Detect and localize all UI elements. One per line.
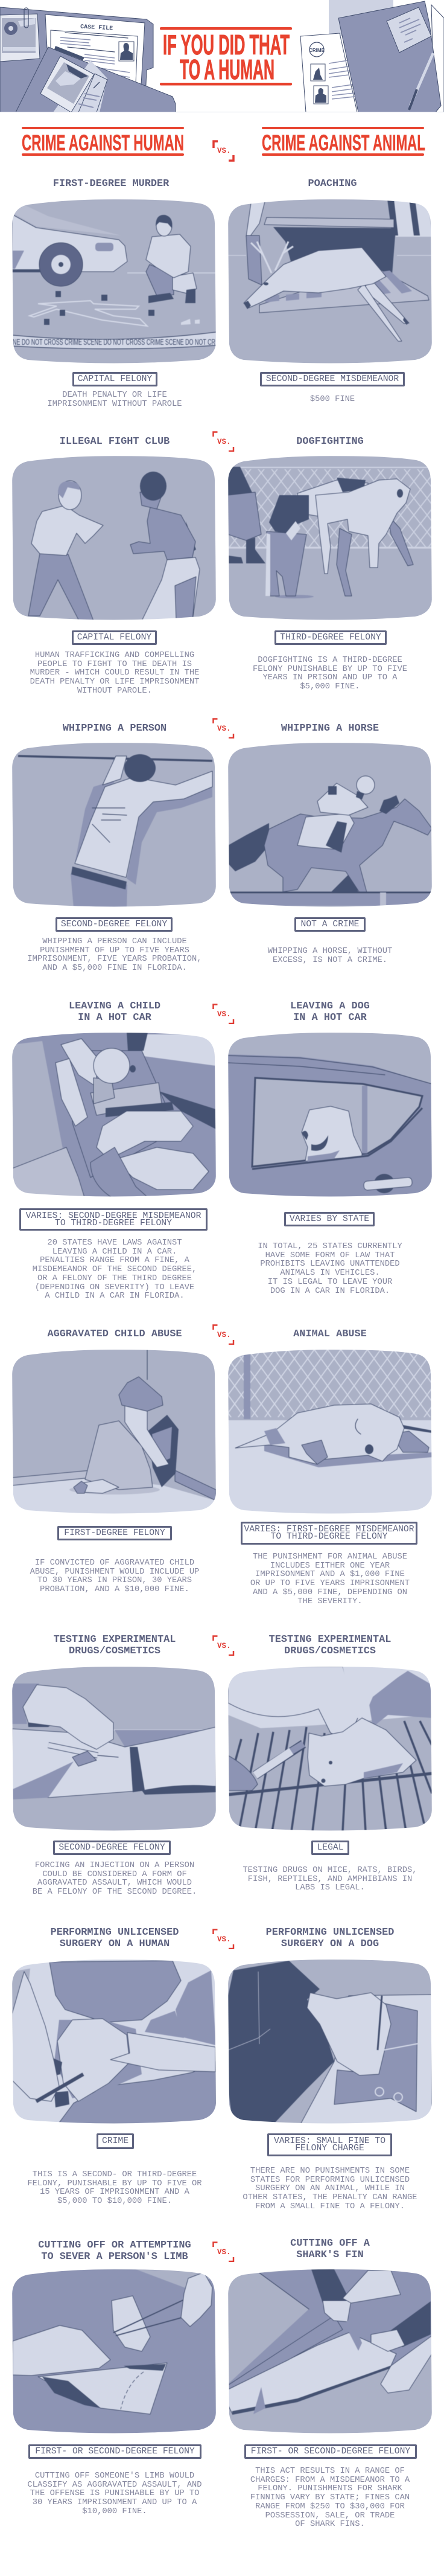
text: dog in car: ANIMALS IN VEHICLES. (280, 1269, 380, 1278)
text: fight club penalty: WITHOUT PAROLE. (77, 687, 152, 696)
badge: second-degree misdemeanor (260, 372, 405, 386)
car door (228, 1054, 432, 1197)
badge: varies by state: VARIES BY STATE (290, 1214, 369, 1224)
panel: baby in car seat (12, 1033, 216, 1197)
text: child in car (33, 1238, 197, 1301)
text: dog in car (258, 1242, 402, 1296)
text: shark fin: FINNING VARY BY STATE; FINES CAN (250, 2493, 410, 2502)
badge: crime (97, 2133, 134, 2149)
badge: second-degree felony (56, 917, 173, 932)
text: dog in car: HAVE SOME FORM OF LAW THAT (265, 1251, 395, 1260)
row 6 title left: TESTING EXPERIMENTAL (54, 1634, 176, 1645)
row 6 title right: DRUGS/COSMETICS (284, 1645, 376, 1657)
text: child in car: (DEPENDING ON SEVERITY) TO LEAVE (35, 1283, 194, 1292)
text: child abuse: TO 30 YEARS IN PRISON, 30 YEARS (37, 1576, 192, 1585)
car seat (56, 1039, 174, 1177)
sheet (300, 1994, 432, 2124)
text: child in car: A CHILD IN A CAR IN FLORIDA. (45, 1292, 185, 1301)
row 7 title left: SURGERY ON A HUMAN (60, 1938, 170, 1949)
text: child in car: OR A FELONY OF THE THIRD DEGREE (37, 1274, 192, 1283)
panel: dead deer on tailgate (228, 199, 432, 364)
badge: capital felony: CAPITAL FELONY (78, 374, 152, 384)
badge: capital felony (72, 630, 157, 645)
window with dog (252, 1078, 422, 1169)
vs marker row 6 (212, 1635, 234, 1656)
panel: child in corner (12, 1350, 216, 1513)
text: child abuse: ABUSE, PUNISHMENT WOULD INCLUDE UP (30, 1568, 199, 1577)
text: shark fin: THIS ACT RESULTS IN A RANGE OF (255, 2467, 405, 2476)
row 5 title left: AGGRAVATED CHILD ABUSE (47, 1328, 182, 1340)
text: dog surgery: THERE ARE NO PUNISHMENTS IN SOME (250, 2167, 410, 2176)
panel: whipped person (12, 743, 216, 907)
panel: dog in car window (228, 1033, 432, 1197)
text: human surgery: $5,000 TO $10,000 FINE. (57, 2197, 172, 2206)
badge: capital felony: CAPITAL FELONY (77, 633, 151, 642)
panel: limb surgery (12, 2269, 216, 2433)
vs marker row 7: VS. (217, 1935, 231, 1944)
cage bars (228, 1715, 432, 1831)
vs marker row 2 (212, 431, 234, 452)
badge: varies small fine: VARIES: SMALL FINE TO (274, 2136, 385, 2146)
text: animal abuse: THE PUNISHMENT FOR ANIMAL ABUSE (253, 1552, 407, 1562)
vs marker row 5: VS. (217, 1331, 231, 1339)
panel: dogs fighting (228, 456, 432, 620)
badge: varies second-degree misdemeanor: VARIES: SECOND-DEGREE MISDEMEANOR (26, 1211, 201, 1221)
text: shark fin: OF SHARK FINS. (295, 2520, 365, 2529)
badge: second-degree misdemeanor: SECOND-DEGREE MISDEMEANOR (266, 374, 399, 384)
text: whipping a person: PUNISHMENT OF UP TO FIVE YEARS (40, 946, 189, 955)
row 8 title left: CUTTING OFF OR ATTEMPTING (38, 2240, 191, 2251)
baby (90, 1048, 209, 1197)
hands, knife and boot (311, 2269, 432, 2393)
row 1 title left: FIRST-DEGREE MURDER (53, 178, 169, 190)
row 7 title right (266, 1927, 394, 1949)
vs marker row 3: VS. (217, 725, 231, 733)
vs marker row 5 (212, 1324, 234, 1345)
text: animal abuse: INCLUDES EITHER ONE YEAR (270, 1562, 390, 1571)
text: limb: CLASSIFY AS AGGRAVATED ASSAULT, AND (27, 2481, 202, 2490)
right paper stack and folder: CRIME (309, 48, 325, 53)
badge: varies second-degree misdemeanor (19, 1208, 208, 1231)
vs marker row 8: VS. (217, 2248, 231, 2257)
spectator legs (228, 467, 265, 563)
chalk outline and evidence markers (30, 291, 200, 326)
text: dogfighting penalty: $5,000 FINE. (300, 682, 360, 691)
badge: first or second degree felony right (244, 2444, 417, 2459)
badge: capital felony (72, 372, 157, 386)
left dog (265, 478, 370, 598)
text: shark fin (250, 2467, 410, 2529)
row 4 title right: LEAVING A DOG (290, 1001, 370, 1012)
police car (12, 199, 216, 286)
deck (228, 2269, 432, 2389)
text: limb: $10,000 FINE. (82, 2507, 147, 2516)
panel: surgery on human (12, 1959, 216, 2123)
text: drug testing: TESTING DRUGS ON MICE, RATS, BIRDS, (243, 1866, 417, 1875)
text: whipping a person: AND A $5,000 FINE IN FLORIDA. (42, 964, 187, 973)
text: shark fin: RANGE FROM $250 TO $30,000 FOR (255, 2502, 405, 2511)
rail (228, 892, 432, 907)
door handle (364, 1174, 413, 1193)
right fighter (130, 472, 200, 621)
text: dogfighting penalty: DOGFIGHTING IS A THIRD-DEGREE (258, 656, 402, 665)
text: fight club penalty: DEATH PENALTY OR LIFE IMPRISONMENT (30, 678, 199, 687)
text: limb: CUTTING OFF SOMEONE'S LIMB WOULD (35, 2472, 194, 2481)
badge: first-degree felony (57, 1526, 172, 1540)
right paper stack and folder (0, 0, 444, 112)
gloved hands and clamp (307, 1993, 432, 2101)
glove, clamp and gauze (13, 2272, 212, 2376)
badge: first or second degree felony: FIRST- OR SECOND-DEGREE FELONY (35, 2447, 195, 2456)
text: drug testing (243, 1866, 417, 1892)
badge: varies second-degree misdemeanor: TO THIRD-DEGREE FELONY (55, 1219, 172, 1228)
row 2 title right: DOGFIGHTING (296, 436, 364, 447)
text: child abuse (30, 1559, 199, 1594)
text: murder penalty (47, 391, 182, 409)
badge: legal: LEGAL (317, 1843, 344, 1853)
hand holding rat (228, 1667, 432, 1739)
header illustration: case file folders (0, 0, 444, 112)
polaroid: crime scene (0, 8, 40, 62)
vs marker row 2: VS. (217, 438, 231, 446)
row 3 title right: WHIPPING A HORSE (281, 723, 379, 734)
panel: surgery on dog (228, 1959, 432, 2123)
horse (228, 795, 432, 892)
vs marker heading (212, 140, 235, 162)
foreground folder with deer photo (16, 46, 176, 112)
text: child in car: 20 STATES HAVE LAWS AGAINST (47, 1238, 182, 1248)
badge: second-degree felony (53, 1841, 171, 1855)
row 7 title right: PERFORMING UNLICENSED (266, 1927, 394, 1938)
badge: third-degree felony (274, 630, 387, 645)
text: fight club penalty (30, 651, 199, 696)
text: child abuse: IF CONVICTED OF AGGRAVATED CHILD (35, 1559, 194, 1568)
row 7 title left: PERFORMING UNLICENSED (51, 1927, 179, 1938)
badge: varies small fine (267, 2133, 392, 2156)
panel: rat injection (228, 1667, 432, 1831)
text: limb (27, 2472, 202, 2516)
badge: second-degree felony: SECOND-DEGREE FELONY (61, 920, 167, 929)
row 7 title left (51, 1927, 179, 1949)
text: child in car: PENALTIES RANGE FROM A FINE, A (40, 1256, 189, 1265)
panel: crime scene (12, 199, 216, 364)
forced arm (12, 1727, 216, 1799)
dog (235, 1404, 433, 1467)
room corner (12, 1350, 216, 1514)
text: whipping a horse: WHIPPING A HORSE, WITHOUT (268, 947, 392, 956)
text: dog in car: IT IS LEGAL TO LEAVE YOUR (268, 1278, 392, 1287)
text: human surgery: THIS IS A SECOND- OR THIRD-DEGREE (33, 2170, 197, 2179)
vs marker row 7 (212, 1929, 234, 1949)
row 2 title left: ILLEGAL FIGHT CLUB (60, 436, 170, 447)
text: whipping a person: WHIPPING A PERSON CAN INCLUDE (42, 937, 187, 946)
text: forced injection (33, 1861, 197, 1897)
text: fight club penalty: HUMAN TRAFFICKING AND COMPELLING (35, 651, 194, 660)
badge: varies first-degree misdemeanor: VARIES: FIRST-DEGREE MISDEMEANOR (244, 1525, 414, 1534)
text: forced injection: COULD BE CONSIDERED A FORM OF (42, 1870, 187, 1879)
row 8 title right: SHARK'S FIN (296, 2249, 364, 2261)
hand with syringe (12, 1684, 118, 1766)
rat and syringe (255, 1718, 416, 1786)
text: forced injection: AGGRAVATED ASSAULT, WHICH WOULD (37, 1879, 192, 1888)
badge: first or second degree felony (28, 2444, 201, 2459)
right dog (316, 479, 413, 596)
badge: second-degree felony: SECOND-DEGREE FELONY (59, 1843, 165, 1853)
crouching investigator (146, 215, 197, 303)
man at bar (18, 754, 212, 908)
text: dogfighting penalty: FELONY PUNISHABLE BY UP TO FIVE (253, 665, 407, 674)
row 7 title right: SURGERY ON A DOG (281, 1938, 379, 1949)
text: human surgery: 15 YEARS OF IMPRISONMENT AND A (40, 2188, 189, 2197)
row 6 title right (269, 1634, 391, 1657)
badge: not a crime (294, 917, 366, 932)
vs marker row 4 (212, 1004, 234, 1024)
text: murder penalty: DEATH PENALTY OR LIFE (62, 391, 167, 400)
text: dog surgery: FROM A SMALL FINE TO A FELONY. (255, 2202, 405, 2211)
text: dogfighting penalty (253, 656, 407, 691)
gloved hands (12, 1972, 215, 2101)
badge: varies first-degree misdemeanor (241, 1522, 417, 1545)
surgeon head and shoulders (12, 1961, 216, 2124)
vs marker row 4: VS. (217, 1010, 231, 1019)
badge: first-degree felony: FIRST-DEGREE FELONY (64, 1528, 165, 1538)
text: shark fin: CHARGES: FROM A MISDEMEANOR TO A (250, 2476, 410, 2485)
text: fight club penalty: PEOPLE TO FIGHT TO THE DEATH IS (37, 660, 192, 669)
text: human surgery (27, 2170, 202, 2206)
text: dog surgery: STATES FOR PERFORMING UNLICENSED (250, 2176, 410, 2185)
text: whipping a person: IMPRISONMENT, FIVE YEARS PROBATION, (27, 955, 202, 964)
left open folder (0, 7, 153, 112)
left open folder: CASE FILE (80, 24, 113, 32)
row 4 title left: IN A HOT CAR (78, 1012, 151, 1023)
child (69, 1377, 179, 1495)
crime scene tape (12, 332, 216, 349)
text: animal abuse (250, 1552, 410, 1606)
text: shark fin: POSSESSION, SALE, OR TRADE (265, 2511, 395, 2520)
text: whipping a person (27, 937, 202, 973)
row 6 title left: DRUGS/COSMETICS (69, 1645, 160, 1657)
row 6 title right: TESTING EXPERIMENTAL (269, 1634, 391, 1645)
patient (47, 2019, 142, 2107)
text: animal abuse: AND A $5,000 FINE, DEPENDING ON (253, 1588, 407, 1597)
badge: varies small fine: FELONY CHARGE (295, 2144, 364, 2153)
surgeon arm (228, 1961, 334, 2123)
text: dog in car: PROHIBITS LEAVING UNATTENDED (260, 1260, 400, 1269)
text: dog in car: IN TOTAL, 25 STATES CURRENTLY (258, 1242, 402, 1251)
text: drug testing: FISH, REPTILES, AND AMPHIBIANS IN (248, 1875, 412, 1884)
text: dog in car: DOG IN A CAR IN FLORIDA. (270, 1287, 390, 1296)
text: murder penalty: IMPRISONMENT WITHOUT PAROLE (47, 400, 182, 409)
text: forced injection: BE A FELONY OF THE SECOND DEGREE. (33, 1888, 197, 1897)
text: dogfighting penalty: YEARS IN PRISON AND UP TO A (262, 673, 398, 682)
panel: chained dog (228, 1350, 432, 1513)
row 8 title right (290, 2238, 370, 2261)
vs marker row 3 (212, 718, 234, 739)
badge: crime: CRIME (102, 2136, 128, 2146)
text: limb: THE OFFENSE IS PUNISHABLE BY UP TO (30, 2489, 199, 2498)
shark (228, 2316, 396, 2415)
text: limb: 30 YEARS IMPRISONMENT AND UP TO A (33, 2498, 197, 2507)
panel: jockey on horse (228, 743, 432, 907)
text: animal abuse: THE SEVERITY. (297, 1597, 363, 1606)
vs marker row 6: VS. (217, 1642, 231, 1650)
text: shark fin: FELONY. PUNISHMENTS FOR SHARK (258, 2484, 402, 2493)
badge: legal (311, 1841, 349, 1855)
text: whipping a horse (268, 947, 392, 965)
badge: third-degree felony: THIRD-DEGREE FELONY (280, 633, 381, 642)
text: drug testing: LABS IS LEGAL. (295, 1883, 365, 1892)
row 8 title left: TO SEVER A PERSON'S LIMB (41, 2251, 188, 2262)
row 4 title left: LEAVING A CHILD (69, 1001, 160, 1012)
panel: two men fighting (12, 456, 216, 620)
deer (244, 242, 409, 341)
text: child in car: LEAVING A CHILD IN A CAR. (52, 1248, 177, 1257)
main title (160, 27, 292, 86)
row 4 title left (69, 1001, 160, 1023)
text: child in car: MISDEMEANOR OF THE SECOND DEGREE, (33, 1265, 197, 1274)
text: animal abuse: IMPRISONMENT AND A $1,000 FINE (255, 1570, 405, 1579)
text: poaching penalty: $500 FINE (310, 395, 355, 404)
text: animal abuse: OR UP TO FIVE YEARS IMPRISONMENT (250, 1579, 410, 1588)
row 6 title left (54, 1634, 176, 1657)
car interior (12, 1033, 216, 1197)
vs marker row 8 (212, 2241, 234, 2262)
row 8 title left (38, 2240, 191, 2262)
vs marker heading: VS. (217, 147, 231, 155)
badge: varies by state (284, 1212, 375, 1226)
text: dog surgery: SURGERY ON AN ANIMAL, WHILE IN (255, 2184, 405, 2193)
text: dog surgery (243, 2167, 417, 2211)
text: fight club penalty: MURDER - WHICH COULD RESULT IN THE (30, 668, 199, 678)
badge: not a crime: NOT A CRIME (301, 920, 359, 929)
text: dog surgery: OTHER STATES, THE PENALTY CAN RANGE (243, 2193, 417, 2202)
row 8 title right: CUTTING OFF A (290, 2238, 370, 2249)
truck bed (228, 199, 432, 313)
text: child abuse: PROBATION, AND A $10,000 FINE. (40, 1585, 189, 1594)
panel: shark finning (228, 2269, 432, 2433)
row 3 title left: WHIPPING A PERSON (63, 723, 166, 734)
text: forced injection: FORCING AN INJECTION ON A PERSON (35, 1861, 194, 1870)
text: whipping a horse: EXCESS, IS NOT A CRIME. (273, 956, 387, 965)
text: human surgery: FELONY, PUNISHABLE BY UP TO FIVE OR (27, 2179, 202, 2188)
badge: varies first-degree misdemeanor: TO THIRD-DEGREE FELONY (271, 1532, 387, 1542)
row 4 title right (290, 1001, 370, 1023)
row 1 title right: POACHING (308, 178, 357, 190)
row 5 title right: ANIMAL ABUSE (293, 1328, 367, 1340)
row 4 title right: IN A HOT CAR (293, 1012, 367, 1023)
badge: first or second degree felony right: FIRST- OR SECOND-DEGREE FELONY (251, 2447, 410, 2456)
panel: injection into arm (12, 1667, 216, 1831)
left fighter (28, 481, 103, 621)
drape and cut patch (38, 2269, 211, 2414)
jockey (297, 776, 375, 853)
